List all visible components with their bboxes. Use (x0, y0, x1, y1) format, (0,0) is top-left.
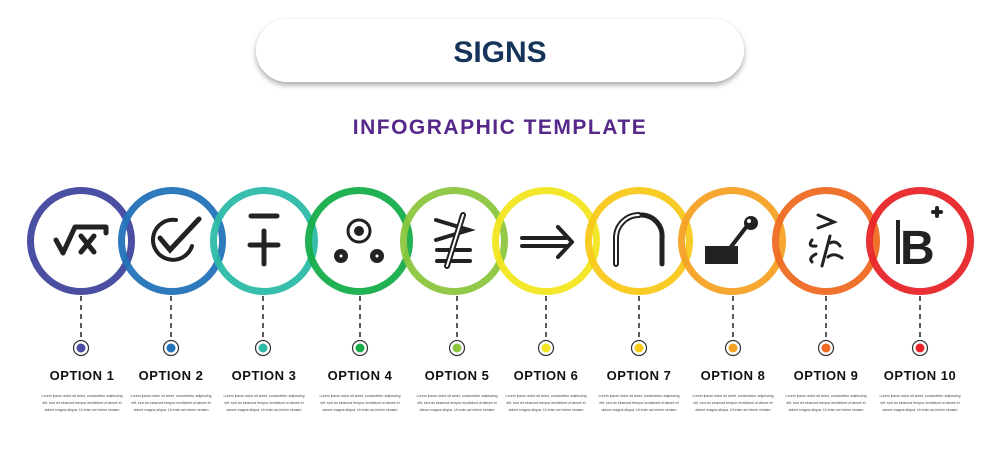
descriptions: elit, sed do eiusmod tempor incididunt ut labore et (42, 401, 122, 405)
descriptions: dolore magna aliqua. Ut enim ad minim veniam (226, 408, 302, 412)
option labels: OPTION 6 (514, 368, 578, 383)
descriptions: Lorem ipsum dolor sit amet, consectetur adipiscing (506, 394, 586, 398)
descriptions: elit, sed do eiusmod tempor incididunt ut labore et (224, 401, 304, 405)
descriptions: dolore magna aliqua. Ut enim ad minim veniam (44, 408, 120, 412)
descriptions: elit, sed do eiusmod tempor incididunt ut labore et (320, 401, 400, 405)
option labels: OPTION 10 (884, 368, 956, 383)
descriptions: Lorem ipsum dolor sit amet, consectetur adipiscing (880, 394, 960, 398)
descriptions: elit, sed do eiusmod tempor incididunt ut labore et (417, 401, 497, 405)
descriptions: elit, sed do eiusmod tempor incididunt ut labore et (599, 401, 679, 405)
title: SIGNS (453, 36, 547, 69)
descriptions: dolore magna aliqua. Ut enim ad minim veniam (882, 408, 958, 412)
descriptions: elit, sed do eiusmod tempor incididunt ut labore et (880, 401, 960, 405)
descriptions: elit, sed do eiusmod tempor incididunt ut labore et (786, 401, 866, 405)
descriptions: elit, sed do eiusmod tempor incididunt ut labore et (693, 401, 773, 405)
descriptions: Lorem ipsum dolor sit amet, consectetur adipiscing (786, 394, 866, 398)
option labels: OPTION 3 (232, 368, 296, 383)
descriptions: dolore magna aliqua. Ut enim ad minim veniam (419, 408, 495, 412)
option labels: OPTION 7 (607, 368, 671, 383)
descriptions: Lorem ipsum dolor sit amet, consectetur adipiscing (693, 394, 773, 398)
subtitle: INFOGRAPHIC TEMPLATE (353, 116, 647, 139)
descriptions: Lorem ipsum dolor sit amet, consectetur adipiscing (42, 394, 122, 398)
option labels: OPTION 5 (425, 368, 489, 383)
option labels: OPTION 4 (328, 368, 393, 383)
icon: check (153, 219, 199, 260)
option labels: OPTION 2 (139, 368, 203, 383)
icon: curly symbols (810, 215, 842, 266)
descriptions: Lorem ipsum dolor sit amet, consectetur adipiscing (417, 394, 497, 398)
connectors and dots (74, 296, 928, 356)
descriptions: dolore magna aliqua. Ut enim ad minim veniam (788, 408, 864, 412)
descriptions: dolore magna aliqua. Ut enim ad minim veniam (322, 408, 398, 412)
icon: arch (616, 215, 662, 264)
descriptions: elit, sed do eiusmod tempor incididunt ut labore et (131, 401, 211, 405)
option labels: OPTION 9 (794, 368, 858, 383)
descriptions: dolore magna aliqua. Ut enim ad minim veniam (508, 408, 584, 412)
descriptions: Lorem ipsum dolor sit amet, consectetur adipiscing (320, 394, 400, 398)
descriptions: dolore magna aliqua. Ut enim ad minim veniam (133, 408, 209, 412)
descriptions: Lorem ipsum dolor sit amet, consectetur adipiscing (131, 394, 211, 398)
icon: minus plus (250, 216, 278, 264)
descriptions: dolore magna aliqua. Ut enim ad minim veniam (601, 408, 677, 412)
option labels: OPTION 1 (50, 368, 114, 383)
circles row (30, 190, 970, 292)
icon: not greater equal (436, 215, 470, 266)
descriptions (42, 394, 960, 412)
title pill (256, 19, 744, 82)
option labels (50, 368, 956, 383)
descriptions: dolore magna aliqua. Ut enim ad minim veniam (695, 408, 771, 412)
icon: B plus (896, 208, 941, 275)
icon: square root x (56, 227, 106, 253)
icon: circles (334, 220, 384, 263)
descriptions: Lorem ipsum dolor sit amet, consectetur adipiscing (599, 394, 679, 398)
icon: B plus: B (900, 222, 935, 275)
descriptions: elit, sed do eiusmod tempor incididunt ut labore et (506, 401, 586, 405)
descriptions: Lorem ipsum dolor sit amet, consectetur adipiscing (224, 394, 304, 398)
option labels: OPTION 8 (701, 368, 765, 383)
icon: arrow (522, 227, 572, 257)
icon: joystick (705, 216, 758, 264)
